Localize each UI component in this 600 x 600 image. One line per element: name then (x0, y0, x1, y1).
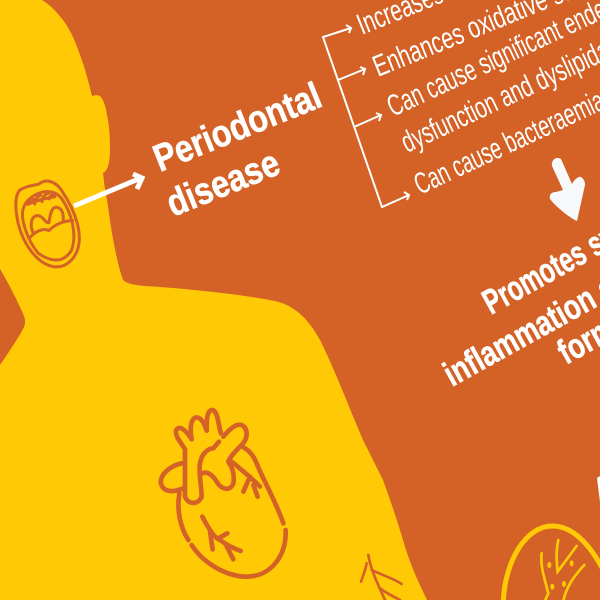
bracket arrows (323, 25, 409, 207)
heading: periodontal disease: Periodontal (148, 75, 327, 180)
icon: open mouth (16, 181, 79, 267)
heading: periodontal disease: disease (161, 142, 286, 225)
icon: artery vein branch (361, 555, 402, 600)
arrow: mouth to periodontal disease (74, 174, 142, 206)
left arm gap (0, 269, 25, 365)
heading: periodontal disease (148, 75, 327, 225)
icon: artery cross-section circle (503, 526, 600, 600)
list of effects (352, 0, 600, 201)
partial text fragment at right edge (597, 476, 600, 502)
icon: heart (161, 410, 286, 577)
icon: down arrow (550, 158, 585, 221)
body silhouette (0, 0, 427, 600)
